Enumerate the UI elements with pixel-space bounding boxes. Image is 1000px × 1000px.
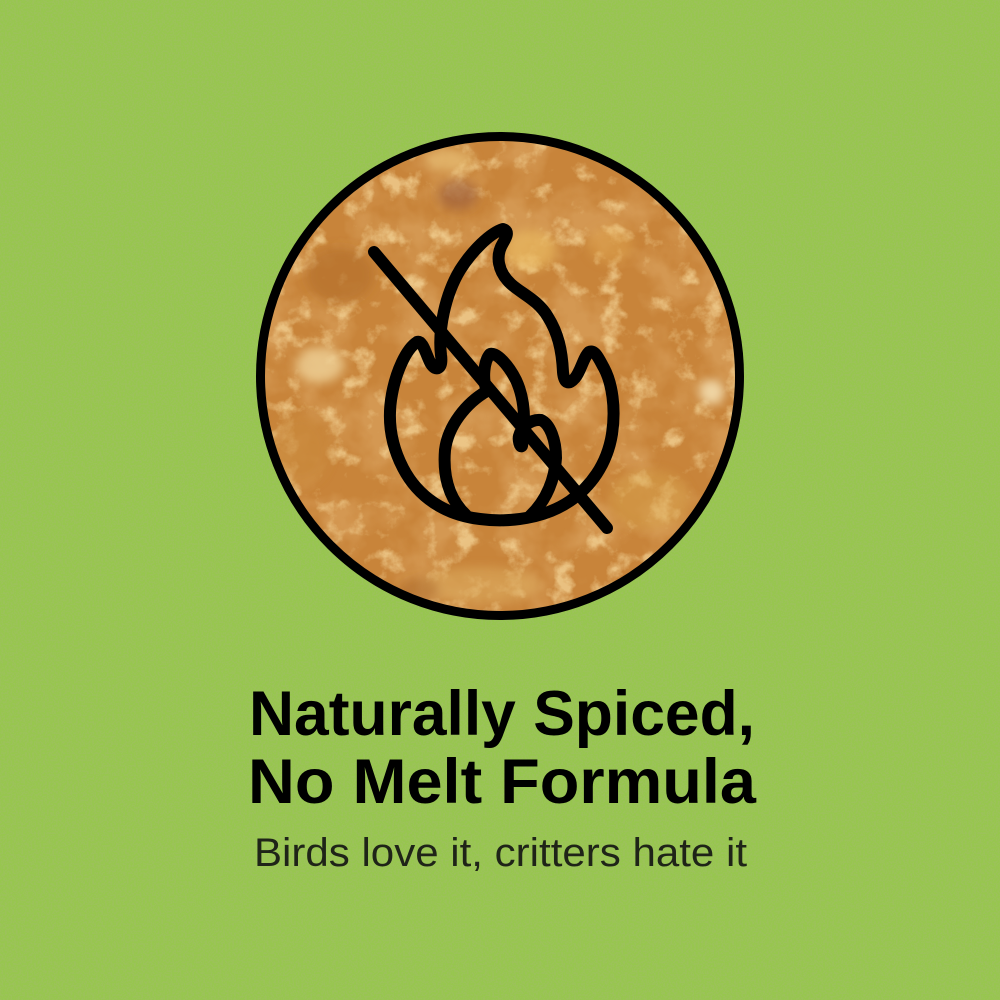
icon: strike-through line bbox=[374, 252, 607, 528]
title: second line: No Melt Formula bbox=[248, 747, 757, 817]
subtitle: Birds love it, critters hate it bbox=[254, 831, 747, 875]
icon: outer flame bbox=[390, 229, 614, 520]
panel: spiced suet cake disc bbox=[256, 132, 744, 620]
icon: crossed-out flame bbox=[374, 229, 614, 528]
icon: inner flame bbox=[445, 354, 556, 516]
title: Naturally Spiced, bbox=[249, 679, 755, 749]
